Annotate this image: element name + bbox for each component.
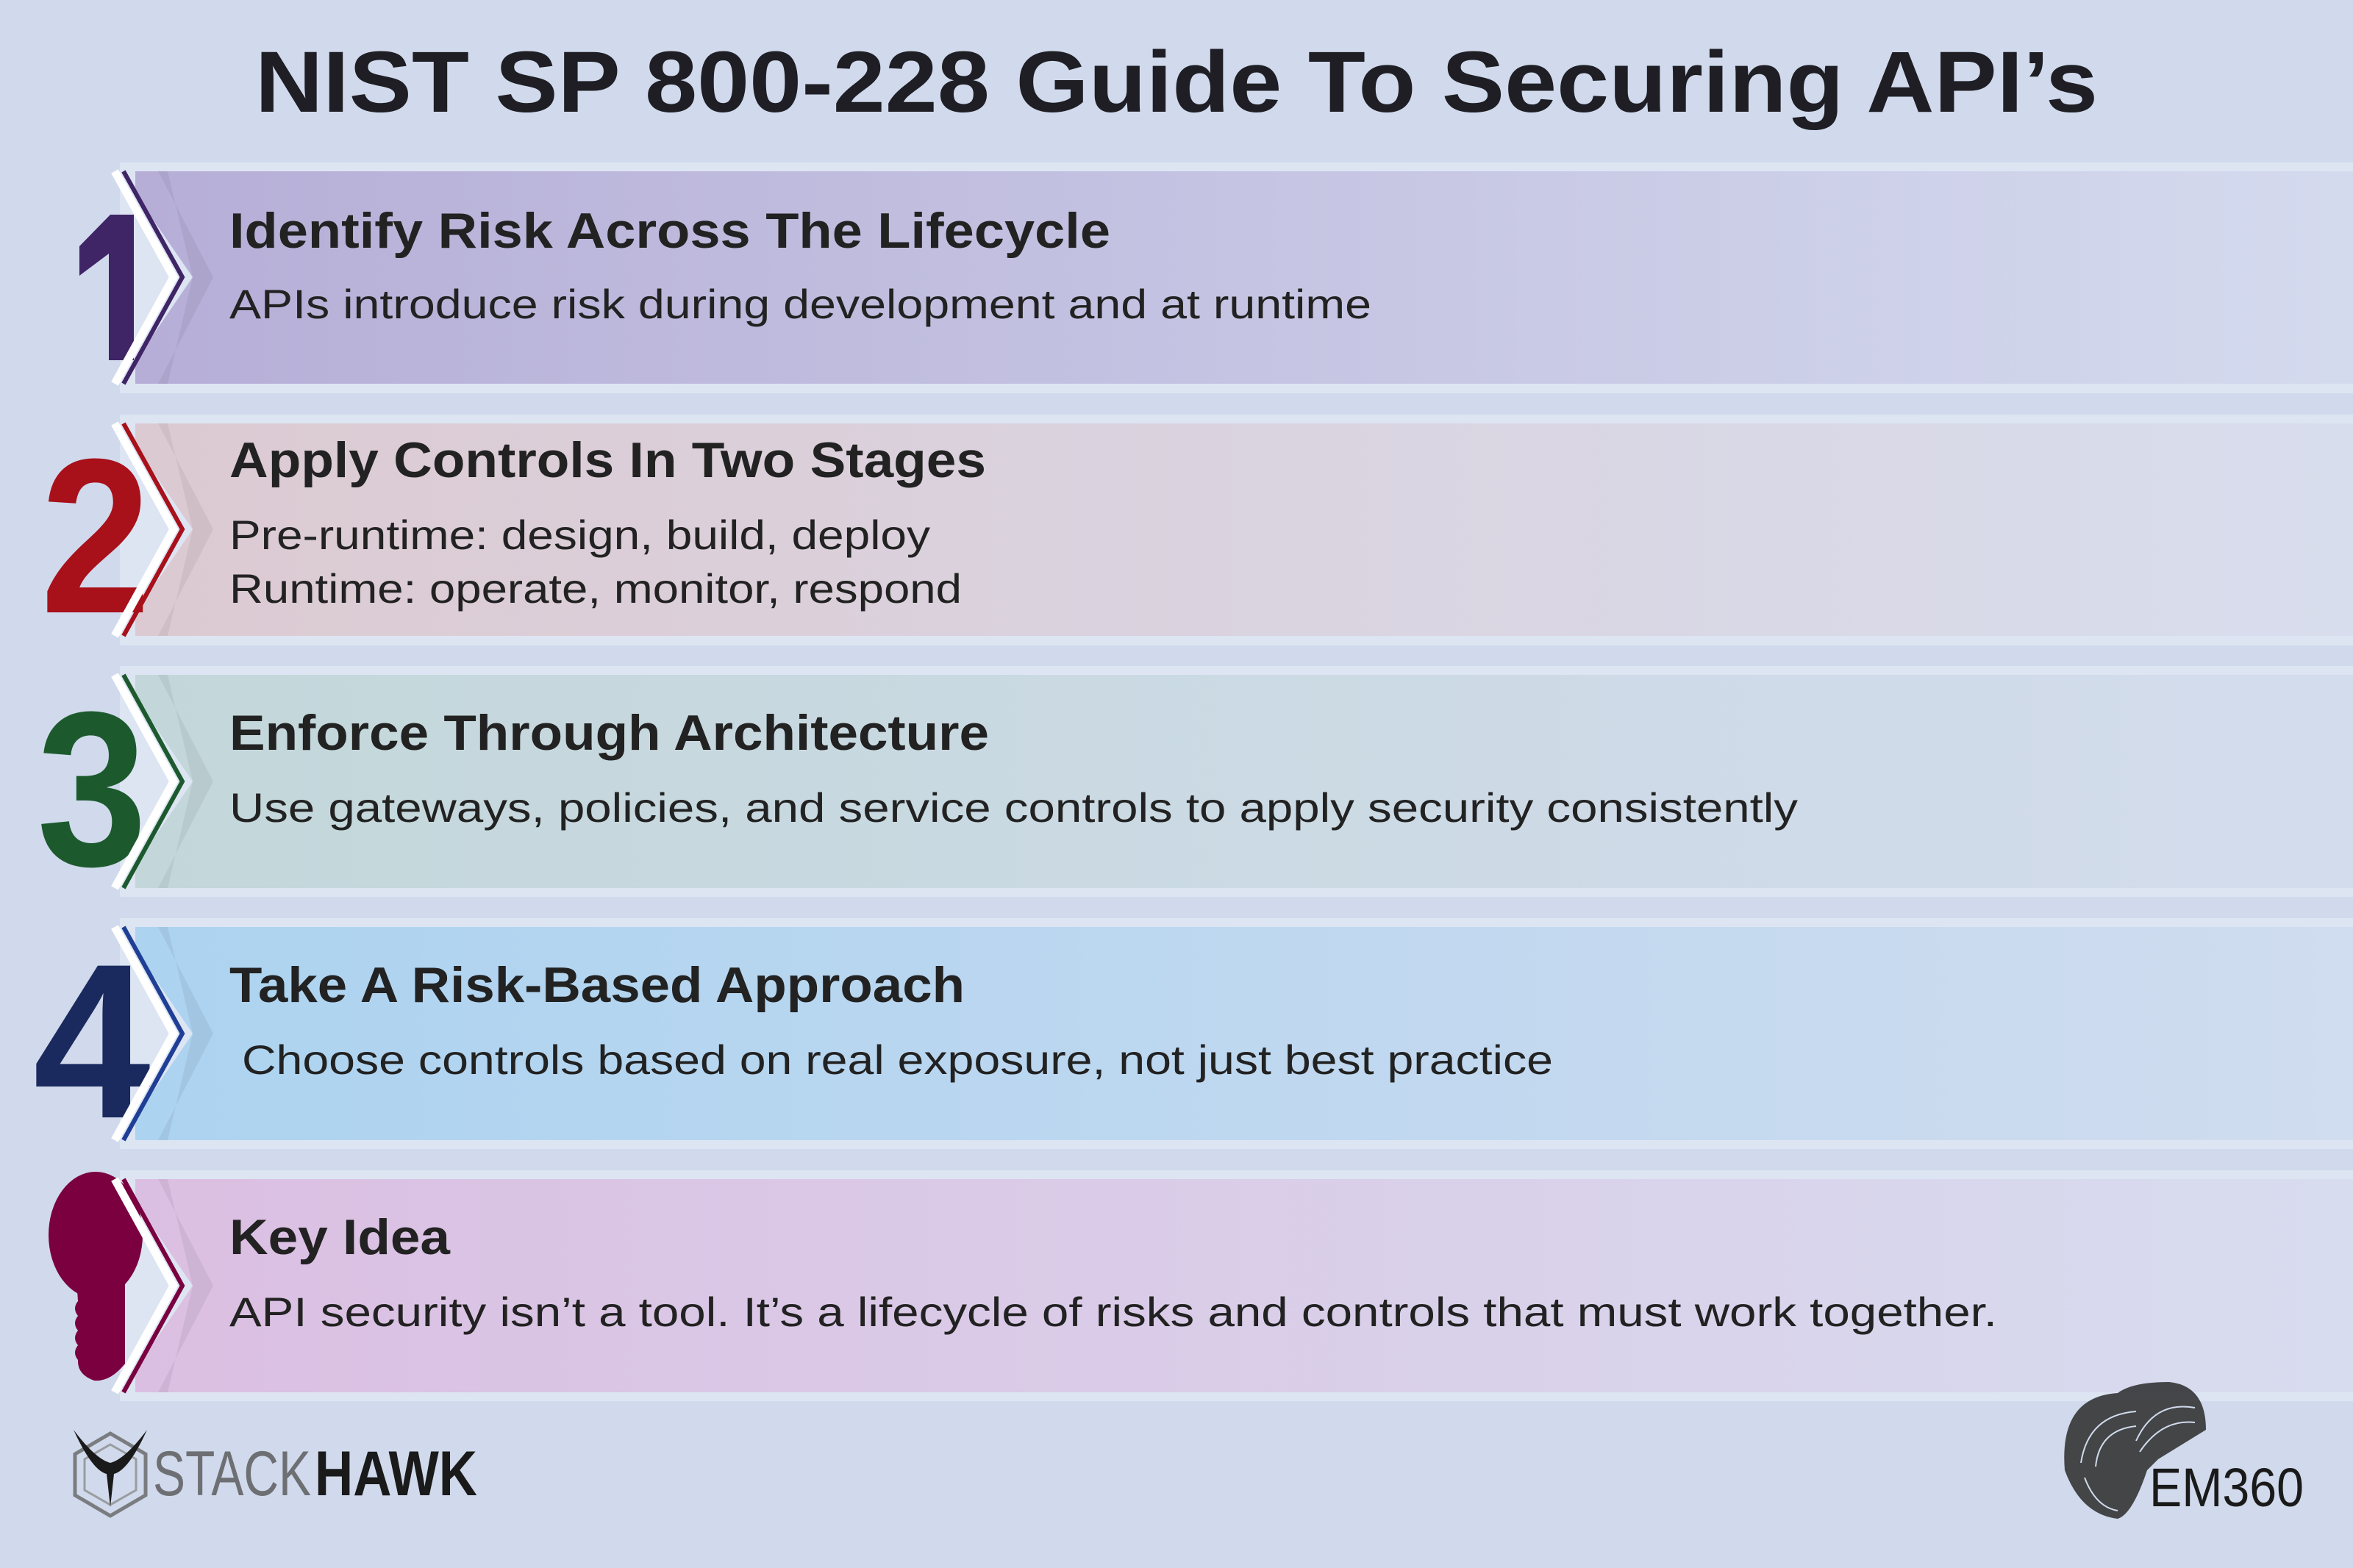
text 4: Choose controls based on real exposure, not just best practice — [242, 1037, 1553, 1083]
number 2: 2 — [40, 412, 151, 659]
icon: key — [49, 1172, 143, 1381]
logo: em360: EM360 — [2149, 1457, 2304, 1518]
number 1 — [79, 215, 134, 360]
number 4: 4 — [33, 917, 152, 1164]
text 5: API security isn’t a tool. It’s a lifecycle of risks and controls that must work together. — [229, 1289, 1997, 1335]
panel: step 2 — [40, 412, 2353, 659]
panel: step 1 — [79, 162, 2353, 393]
logo: stackhawk: HAWK — [315, 1439, 477, 1509]
panel: key idea — [49, 1170, 2353, 1401]
text 3: Use gateways, policies, and service controls to apply security consistently — [229, 784, 1798, 831]
panel: step 3 — [37, 665, 2353, 912]
heading 1: Identify Risk Across The Lifecycle — [229, 203, 1110, 259]
heading 3: Enforce Through Architecture — [229, 705, 989, 761]
number 3: 3 — [37, 665, 147, 912]
heading 5: Key Idea — [229, 1209, 451, 1265]
text 1: APIs introduce risk during development and at runtime — [229, 281, 1371, 327]
logo: em360 — [2064, 1382, 2304, 1519]
logo: stackhawk — [74, 1430, 477, 1516]
heading 4: Take A Risk-Based Approach — [229, 957, 965, 1013]
panel: step 2: Runtime: operate, monitor, respond — [229, 565, 962, 612]
logo: stackhawk: STACK — [153, 1439, 311, 1509]
panel: step 4 — [33, 917, 2353, 1164]
title: NIST SP 800-228 Guide To Securing API’s — [255, 34, 2098, 131]
heading 2: Apply Controls In Two Stages — [229, 432, 986, 488]
text 2: Pre-runtime: design, build, deploy — [229, 512, 930, 558]
